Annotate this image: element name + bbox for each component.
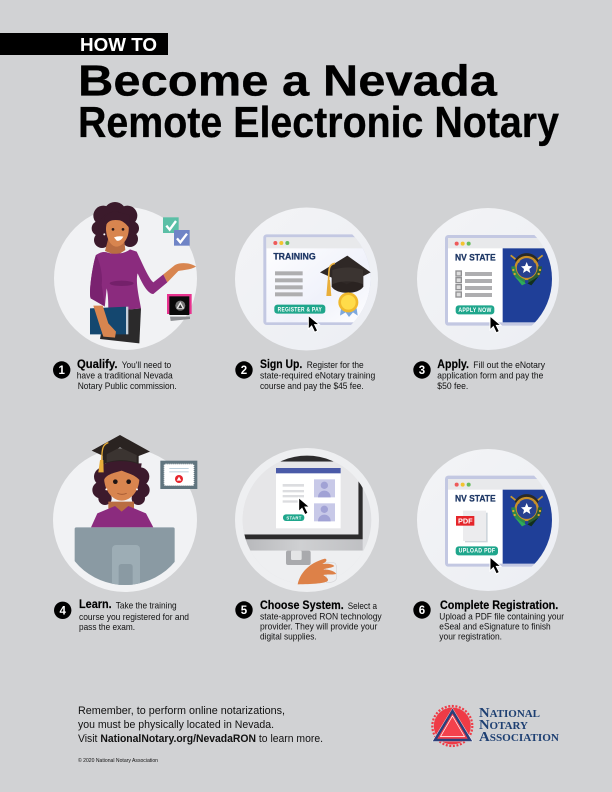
caption 3: application form and pay the xyxy=(437,370,543,380)
circle backdrop 5 xyxy=(235,448,379,592)
caption 6: eSeal and eSignature to finish xyxy=(439,620,551,632)
number badge 1 xyxy=(53,361,70,379)
caption 5: state-approved RON technology xyxy=(260,610,382,622)
panel: step 4 learn xyxy=(53,435,197,632)
footer reminder text: you must be physically located in Nevada. xyxy=(78,719,274,731)
number badge 1: 1 xyxy=(58,365,65,377)
footer reminder text: Visit NationalNotary.org/NevadaRON to learn more. xyxy=(78,733,323,745)
number badge 2 xyxy=(235,361,253,379)
title: Become a Nevada xyxy=(78,56,498,106)
caption 2: Register for the xyxy=(307,359,364,370)
logo emblem xyxy=(432,706,473,746)
caption 5 xyxy=(260,600,382,642)
illustration: upload PDF window: PDF xyxy=(458,518,473,525)
caption 5: Select a xyxy=(348,600,378,611)
number badge 3: 3 xyxy=(419,365,425,377)
circle backdrop 2 xyxy=(235,208,378,350)
caption 1: Notary Public commission. xyxy=(78,380,177,391)
footer reminder text xyxy=(78,705,323,745)
title xyxy=(78,56,559,147)
number badge 4 xyxy=(54,602,71,619)
illustration: NV state application window: APPLY NOW xyxy=(458,308,492,314)
illustration: desktop monitor with hand xyxy=(242,456,372,584)
number badge 4: 4 xyxy=(59,606,66,618)
footer reminder text: Remember, to perform online notarizations, xyxy=(78,705,285,717)
caption 6 xyxy=(439,600,564,642)
illustration: NV state application window xyxy=(445,235,559,333)
illustration: training window with cap: REGISTER & PAY xyxy=(278,307,322,313)
caption 3: Apply. xyxy=(437,359,469,371)
panel: step 6 complete registration xyxy=(413,449,564,642)
number badge 2: 2 xyxy=(241,365,247,377)
logo wordmark: NATIONAL xyxy=(479,706,540,721)
illustration: desktop monitor with hand: START xyxy=(286,515,302,521)
kicker banner: HOW TO xyxy=(0,33,168,55)
panel: step 5 choose system xyxy=(235,448,382,642)
title: Remote Electronic Notary xyxy=(78,98,559,147)
caption 5: provider. They will provide your xyxy=(260,620,377,632)
logo wordmark: ASSOCIATION xyxy=(479,730,559,745)
caption 2 xyxy=(260,359,375,391)
illustration: woman with folder xyxy=(90,202,196,343)
caption 6: Complete Registration. xyxy=(440,600,558,612)
logo wordmark: NOTARY xyxy=(479,718,528,733)
illustration: training window with cap xyxy=(263,234,377,332)
circle backdrop 4 xyxy=(53,448,197,592)
caption 6: Upload a PDF file containing your xyxy=(439,610,564,622)
number badge 5: 5 xyxy=(241,605,248,617)
caption 6: your registration. xyxy=(439,630,502,642)
caption 2: course and pay the $45 fee. xyxy=(260,380,364,391)
caption 2: state-required eNotary training xyxy=(260,370,375,380)
illustration: training window with cap: TRAINING xyxy=(273,252,316,262)
caption 2: Sign Up. xyxy=(260,359,302,371)
caption 4: Learn. xyxy=(79,599,112,611)
number badge 6 xyxy=(413,601,431,619)
caption 5: Choose System. xyxy=(260,600,344,612)
caption 4 xyxy=(79,599,189,632)
illustration: upload PDF window xyxy=(445,476,559,574)
number badge 3 xyxy=(413,361,431,379)
caption 1 xyxy=(77,359,177,391)
caption 3: Fill out the eNotary xyxy=(473,359,545,370)
caption 3 xyxy=(437,359,545,391)
caption 4: pass the exam. xyxy=(79,621,135,632)
illustration: NV state application window: NV STATE xyxy=(455,253,496,263)
caption 1: You'll need to xyxy=(122,359,171,370)
caption 5: digital supplies. xyxy=(260,630,317,642)
illustration: upload PDF window: NV STATE xyxy=(455,494,496,504)
kicker banner: HOW TO: HOW TO xyxy=(80,35,157,55)
number badge 5 xyxy=(235,601,253,619)
panel: step 1 qualify xyxy=(53,202,197,391)
caption 1: Qualify. xyxy=(77,359,118,371)
panel: step 2 sign up xyxy=(235,208,378,391)
caption 4: course you registered for and xyxy=(79,611,189,622)
number badge 6: 6 xyxy=(419,605,425,617)
copyright line: © 2020 National Notary Association xyxy=(78,757,158,764)
caption 4: Take the training xyxy=(116,600,177,610)
circle backdrop 6 xyxy=(417,449,559,591)
caption 3: $50 fee. xyxy=(437,380,468,391)
logo: National Notary Association xyxy=(432,706,559,746)
logo wordmark xyxy=(479,706,559,745)
illustration: upload PDF window: UPLOAD PDF xyxy=(459,549,495,555)
circle backdrop 3 xyxy=(417,208,559,350)
circle backdrop 1 xyxy=(54,207,197,350)
caption 1: have a traditional Nevada xyxy=(77,370,173,380)
illustration: graduate at computer xyxy=(75,435,197,591)
panel: step 3 apply xyxy=(413,208,559,391)
